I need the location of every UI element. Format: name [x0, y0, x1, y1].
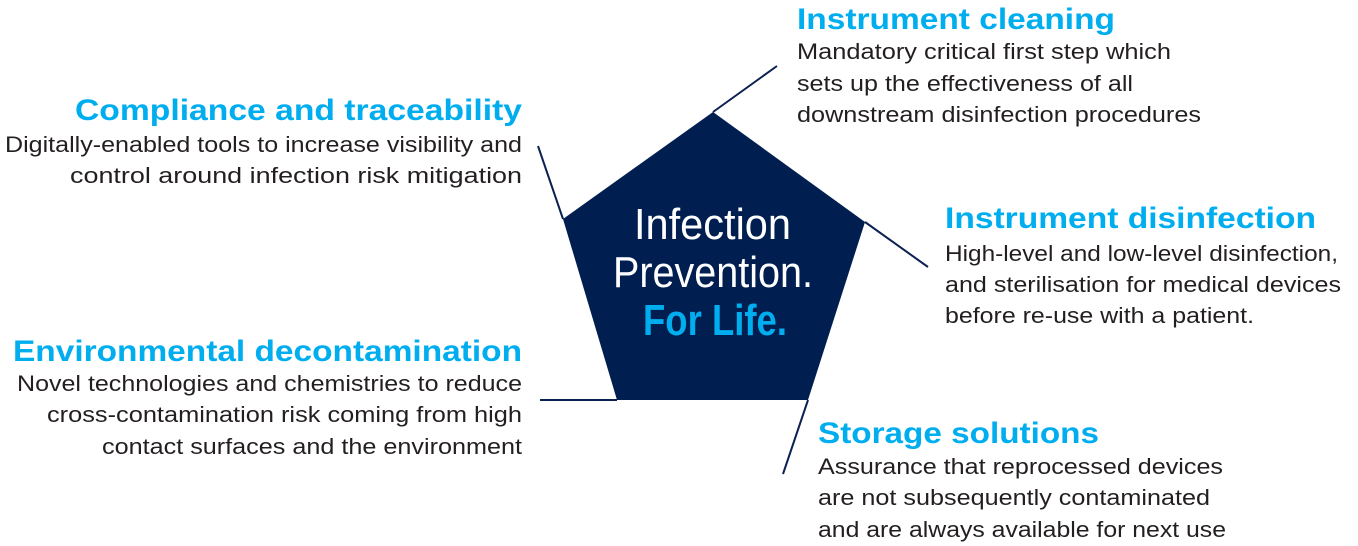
text block: instrument cleaning: sets up the effectiveness of all — [797, 71, 1133, 96]
text block: storage solutions: and are always available for next use — [818, 517, 1226, 542]
text block: environmental decontamination: Novel technologies and chemistries to reduce — [17, 371, 522, 396]
text block: environmental decontamination: contact surfaces and the environment — [102, 434, 522, 459]
text block: instrument cleaning: downstream disinfection procedures — [797, 102, 1201, 127]
text block: compliance and traceability: Digitally-enabled tools to increase visibility and — [5, 132, 522, 157]
pentagon: infection prevention: For Life. — [643, 296, 787, 345]
text block: instrument cleaning: Instrument cleaning — [797, 3, 1115, 36]
text block: instrument cleaning: Mandatory critical first step which — [797, 39, 1171, 64]
text block: storage solutions — [818, 417, 1226, 542]
text block: instrument cleaning — [797, 3, 1201, 127]
pentagon: infection prevention — [563, 112, 865, 400]
text block: environmental decontamination: Environmental decontamination — [13, 335, 522, 368]
connector lines — [538, 66, 928, 474]
pentagon: infection prevention: Infection — [634, 200, 791, 249]
text block: compliance and traceability: Compliance and traceability — [75, 94, 522, 127]
text block: instrument disinfection: before re-use with a patient. — [945, 303, 1254, 328]
text block: instrument disinfection: and sterilisation for medical devices — [945, 272, 1341, 297]
text block: storage solutions: are not subsequently contaminated — [818, 485, 1210, 510]
text block: instrument disinfection — [945, 202, 1341, 328]
pentagon: infection prevention: Prevention. — [613, 248, 813, 297]
text block: compliance and traceability: control around infection risk mitigation — [70, 163, 522, 188]
text block: environmental decontamination — [13, 335, 522, 459]
text block: storage solutions: Assurance that reprocessed devices — [818, 454, 1223, 479]
text block: instrument disinfection: Instrument disinfection — [945, 202, 1316, 235]
text block: environmental decontamination: cross-contamination risk coming from high — [47, 402, 522, 427]
text block: instrument disinfection: High-level and low-level disinfection, — [945, 241, 1338, 266]
text block: storage solutions: Storage solutions — [818, 417, 1099, 450]
text block: compliance and traceability — [5, 94, 522, 188]
